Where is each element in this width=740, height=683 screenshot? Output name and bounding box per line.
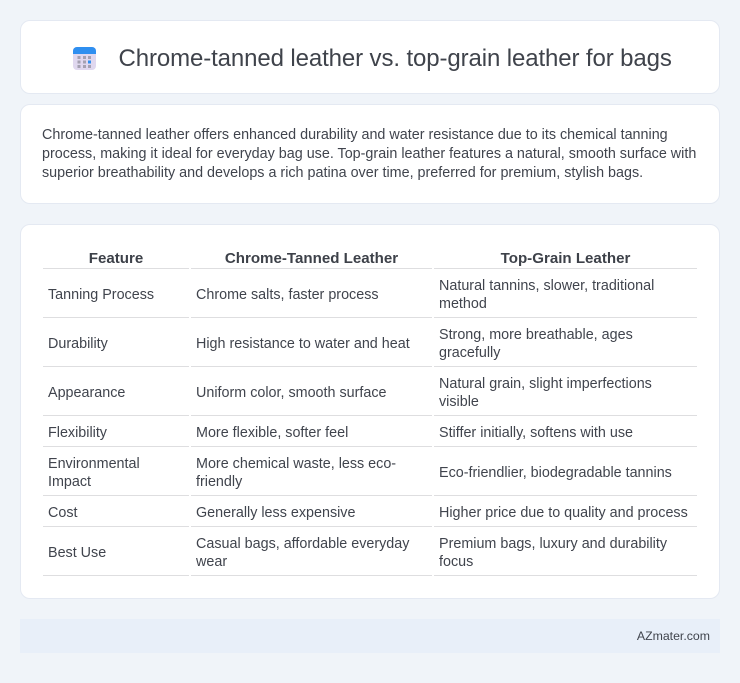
row: durability: Durability <box>48 336 108 352</box>
footer brand text: AZmater.com <box>637 629 710 643</box>
row: tanning process: Tanning Process <box>48 287 154 303</box>
intro text card <box>20 104 720 204</box>
row: appearance <box>43 376 697 416</box>
row: best use <box>43 536 697 576</box>
row: environmental impact: More chemical waste, less eco- <box>196 456 396 472</box>
row: durability <box>43 327 697 367</box>
row: cost: Cost <box>48 505 78 521</box>
footer bar <box>20 619 720 653</box>
row: tanning process <box>43 278 697 318</box>
row: environmental impact <box>43 456 697 496</box>
row: appearance: Uniform color, smooth surface <box>196 385 387 401</box>
row: cost: Generally less expensive <box>196 505 355 521</box>
row: environmental impact: Impact <box>48 474 91 490</box>
row: tanning process: method <box>439 296 487 312</box>
comparison table <box>43 250 697 576</box>
row: durability: Strong, more breathable, ages <box>439 327 633 343</box>
row: tanning process: Natural tannins, slower, traditional <box>439 278 654 294</box>
title card <box>20 20 720 94</box>
row: best use: wear <box>196 554 227 570</box>
table header row <box>43 250 697 269</box>
table header row: Feature <box>89 250 143 267</box>
row: durability: High resistance to water and heat <box>196 336 410 352</box>
row: environmental impact: Eco-friendlier, biodegradable tannins <box>439 465 672 481</box>
row: best use: focus <box>439 554 473 570</box>
icon: calendar <box>73 47 96 70</box>
row: flexibility <box>43 425 697 447</box>
row: appearance: Natural grain, slight imperfections <box>439 376 652 392</box>
comparison table card <box>20 224 720 599</box>
row: flexibility: Flexibility <box>48 425 107 441</box>
intro paragraph: Chrome-tanned leather offers enhanced durability and water resistance due to its chemical tanning <box>42 127 668 143</box>
title: Chrome-tanned leather vs. top-grain leather for bags <box>118 45 672 72</box>
row: environmental impact: friendly <box>196 474 242 490</box>
row: flexibility: Stiffer initially, softens with use <box>439 425 633 441</box>
row: appearance: Appearance <box>48 385 125 401</box>
row: best use: Casual bags, affordable everyday <box>196 536 409 552</box>
row: best use: Premium bags, luxury and durability <box>439 536 667 552</box>
row: tanning process: Chrome salts, faster process <box>196 287 379 303</box>
row: cost: Higher price due to quality and process <box>439 505 688 521</box>
table header row: Chrome-Tanned Leather <box>225 250 398 267</box>
intro paragraph: process, making it ideal for everyday bag use. Top-grain leather features a natural, smooth surface with <box>42 146 696 162</box>
row: cost <box>43 505 697 527</box>
intro paragraph <box>42 127 696 181</box>
row: flexibility: More flexible, softer feel <box>196 425 348 441</box>
row: durability: gracefully <box>439 345 500 361</box>
table header row: Top-Grain Leather <box>501 250 630 267</box>
row: best use: Best Use <box>48 545 106 561</box>
row: environmental impact: Environmental <box>48 456 140 472</box>
intro paragraph: superior breathability and develops a rich patina over time, preferred for premium, stylish bags. <box>42 165 643 181</box>
row: appearance: visible <box>439 394 479 410</box>
